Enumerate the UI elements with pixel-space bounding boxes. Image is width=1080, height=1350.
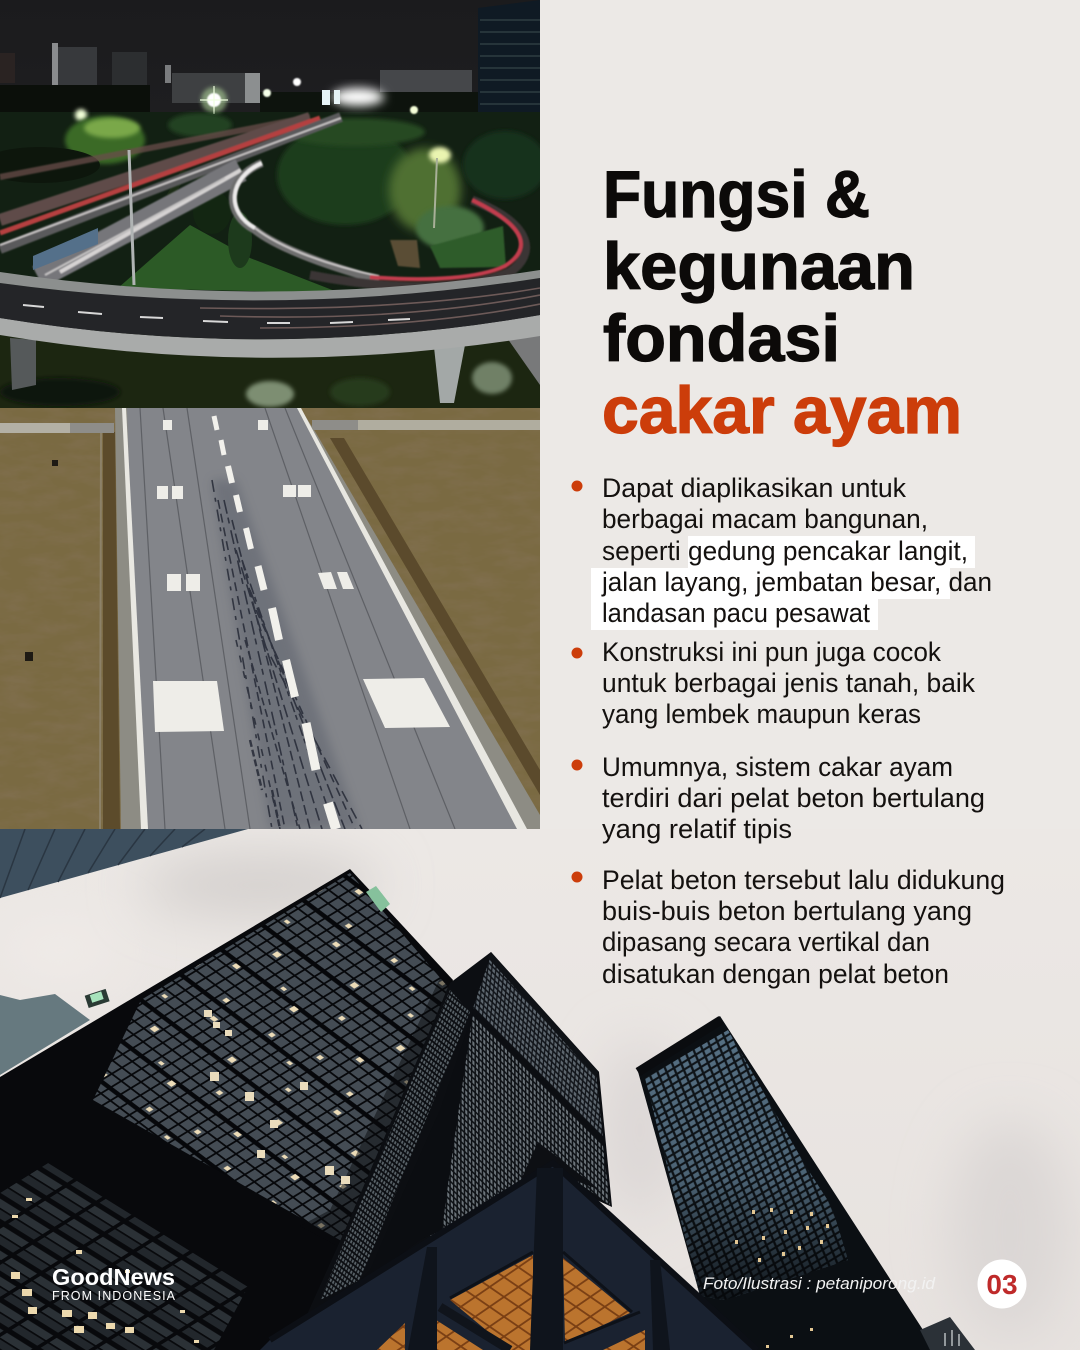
logo: GoodNews from Indonesia: FROM INDONESIA (52, 1289, 176, 1303)
title: cakar ayam (602, 373, 962, 447)
bullet 4: concrete pipes: buis-buis beton bertulang yang (602, 896, 972, 926)
foreground steel frame (260, 1160, 757, 1350)
main black tower (0, 869, 453, 1350)
bullet 3: concrete plate: terdiri dari pelat beton bertulang (602, 783, 985, 813)
bullet 2: soil types (572, 637, 975, 729)
skyline (0, 43, 472, 103)
bullet 3: concrete plate (572, 752, 985, 844)
bullet 1: applications: jalan layang, jembatan besar, dan (601, 567, 992, 597)
bullet 1: applications: seperti gedung pencakar langit, (602, 536, 968, 566)
neighbouring tower sliver (0, 829, 248, 898)
page number badge: 03 (986, 1269, 1018, 1300)
logo: GoodNews from Indonesia (52, 1264, 176, 1303)
bullet 1: applications: Dapat diaplikasikan untuk (602, 473, 906, 503)
title (602, 157, 962, 447)
bullet 4: concrete pipes: disatukan dengan pelat beton (602, 959, 949, 989)
photo: skyscrapers from below (0, 829, 1080, 1350)
lamp post and road sign (33, 150, 437, 285)
bullet 3: concrete plate: Umumnya, sistem cakar ayam (602, 752, 953, 782)
small distant building (920, 1317, 975, 1350)
title: kegunaan (603, 229, 915, 303)
bullet 3: concrete plate: yang relatif tipis (602, 814, 792, 844)
podium with lit windows (0, 1163, 248, 1350)
photo: airport runway (0, 408, 540, 829)
logo: GoodNews from Indonesia: GoodNews (52, 1264, 175, 1290)
bullet 1: applications: landasan pacu pesawat (602, 598, 870, 628)
bullet 4: concrete pipes (572, 865, 1005, 989)
bullet 1: applications: berbagai macam bangunan, (602, 504, 928, 534)
bullet 2: soil types: untuk berbagai jenis tanah, baik (602, 668, 975, 698)
bullet 2: soil types: Konstruksi ini pun juga cocok (602, 637, 941, 667)
bullet 4: concrete pipes: Pelat beton tersebut lalu didukung (602, 865, 1005, 895)
photo: elevated highway at night (0, 0, 547, 408)
street lights (75, 78, 418, 121)
viaduct piers (10, 330, 540, 403)
right tower (637, 1016, 936, 1350)
title: fondasi (603, 301, 840, 375)
distant building and green lantern (0, 989, 110, 1075)
trees and planted areas (0, 113, 547, 293)
bullet 4: concrete pipes: dipasang secara vertikal dan (602, 927, 930, 957)
viaduct (0, 270, 540, 358)
title: Fungsi & (603, 157, 870, 231)
runway surface (122, 408, 527, 829)
page number badge (978, 1260, 1026, 1308)
road light trails (0, 117, 526, 287)
bullet list (572, 473, 1005, 989)
bullet 1: applications (572, 473, 992, 630)
bullet 2: soil types: yang lembek maupun keras (602, 699, 921, 729)
middle tower (320, 952, 612, 1300)
photo credit: Foto/Ilustrasi : petaniporong.id (703, 1274, 936, 1293)
